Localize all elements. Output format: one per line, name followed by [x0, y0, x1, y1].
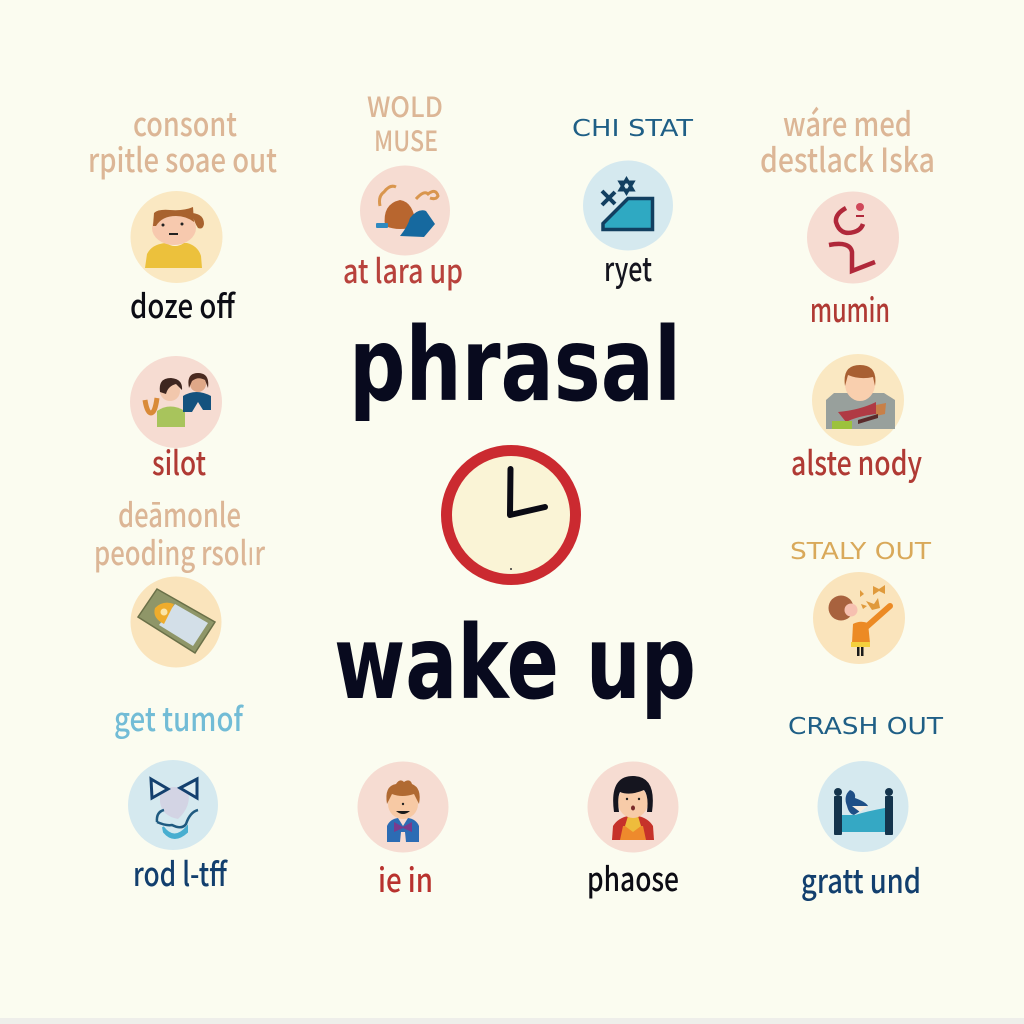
label: WOLD MUSE — [367, 86, 443, 160]
label: deāmonle peoding rsolır: peoding rsolır — [94, 527, 265, 575]
icon: two people — [130, 356, 222, 448]
icon: slope and star — [583, 160, 673, 250]
label: at lara up: at lara up — [343, 245, 463, 293]
label: wáre med destlack Iska: wáre med — [783, 98, 912, 146]
label: deāmonle peoding rsolır: deāmonle — [118, 489, 241, 537]
label: consont rpitle soae out — [88, 98, 277, 182]
icon: woman black hair — [588, 762, 678, 852]
label: silot: silot — [152, 437, 206, 485]
label: WOLD MUSE: WOLD — [367, 86, 443, 126]
label: consont rpitle soae out: rpitle soae out — [88, 134, 277, 182]
label: rod l-tff: rod l-tff — [133, 848, 228, 896]
icon: person sleeping on desk — [360, 166, 450, 256]
label: STALY OUT: STALY OUT — [790, 539, 932, 565]
title: phrasal: phrasal — [349, 306, 681, 425]
label: consont rpitle soae out: consont — [133, 98, 237, 146]
label: deāmonle peoding rsolır — [94, 489, 265, 575]
label: mumin: mumin — [810, 284, 890, 332]
icon: boy with bow tie — [358, 762, 448, 852]
icon: central clock — [446, 450, 576, 580]
label: gratt und: gratt und — [801, 855, 921, 903]
label: wáre med destlack Iska: destlack Iska — [760, 134, 935, 182]
label: CHI STAT: CHI STAT — [572, 116, 694, 142]
icon: child with butterflies — [813, 572, 905, 664]
icon: red squiggle — [807, 192, 899, 284]
title: wake up: wake up — [334, 604, 696, 723]
label: get tumof: get tumof — [114, 693, 244, 741]
icon: person reclining with shoe — [812, 354, 904, 446]
label: ie in: ie in — [378, 854, 433, 902]
icon: tilted card — [130, 576, 222, 668]
icon: blue animal sketch — [128, 760, 218, 850]
icon: child yellow shirt — [130, 191, 222, 283]
label: alste nody: alste nody — [791, 437, 922, 485]
label: WOLD MUSE: MUSE — [374, 120, 438, 160]
label: wáre med destlack Iska — [760, 98, 935, 182]
label: ryet: ryet — [604, 243, 652, 291]
icon: person in bed — [818, 761, 908, 852]
label: doze off: doze off — [130, 280, 236, 328]
label: phaose: phaose — [587, 853, 679, 901]
label: CRASH OUT: CRASH OUT — [788, 714, 944, 740]
